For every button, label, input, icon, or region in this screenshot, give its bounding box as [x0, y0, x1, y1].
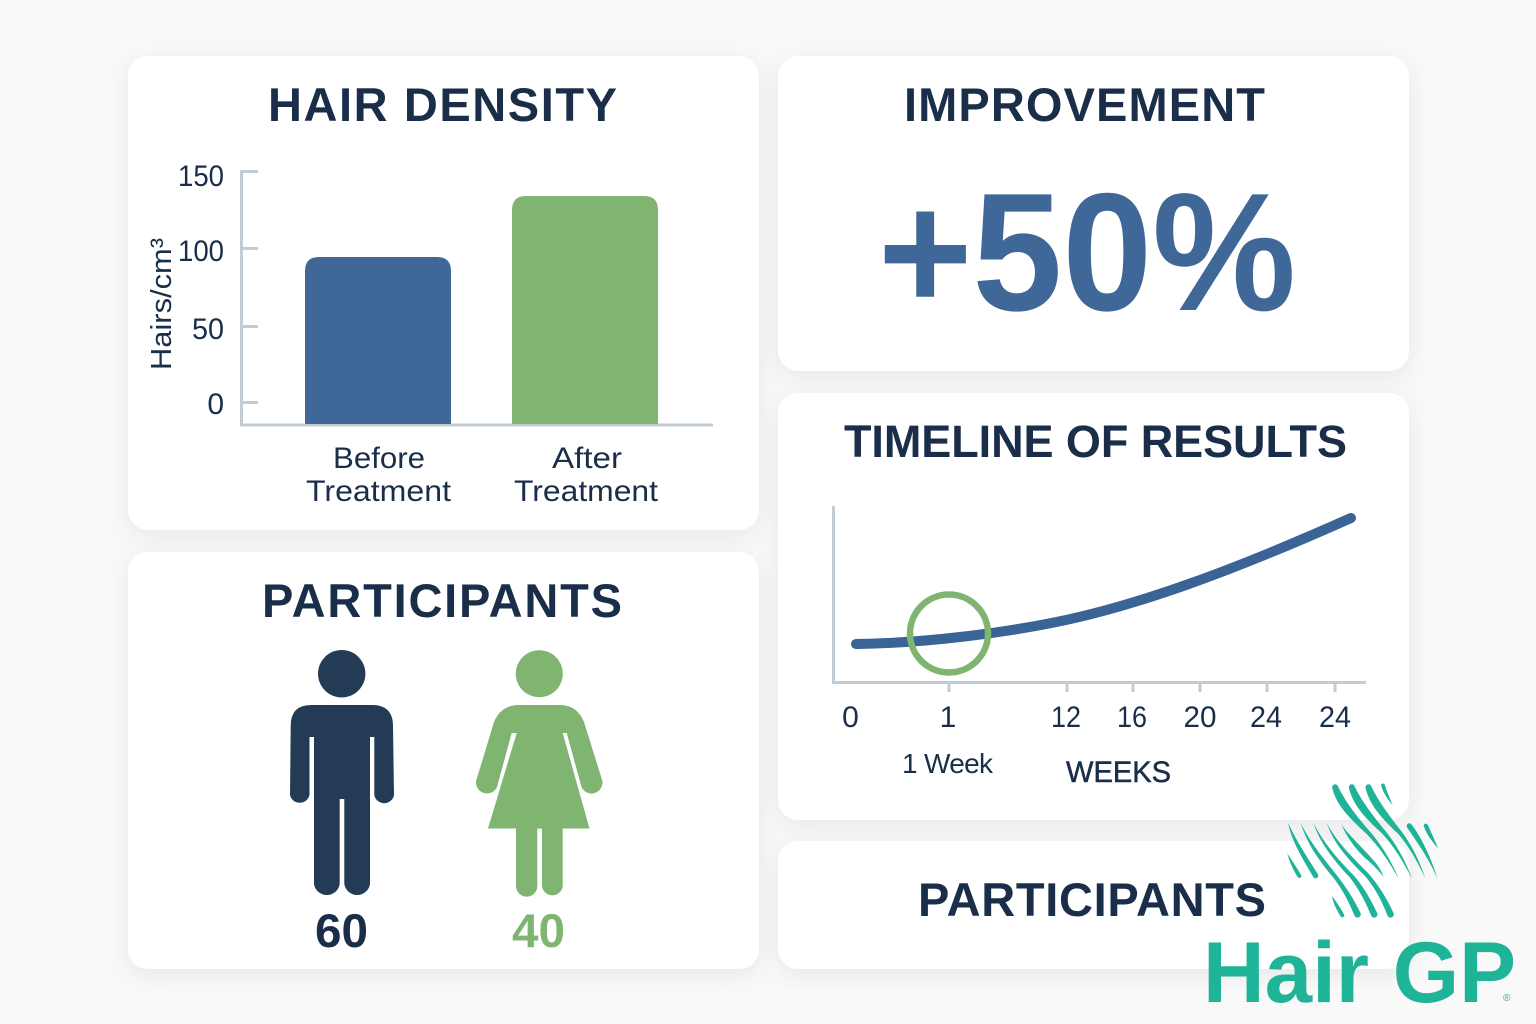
icon: man [290, 650, 394, 895]
y axis values: 0 [207, 388, 224, 421]
y axis values: 50 [192, 313, 224, 346]
curve: results over time [856, 518, 1351, 644]
logo: Hair GP [1203, 784, 1516, 1021]
panel: timeline of results [778, 393, 1409, 820]
label: after treatment [514, 442, 659, 508]
axis title: weeks: WEEKS [1066, 756, 1171, 789]
heading: participants footer: PARTICIPANTS [918, 873, 1266, 926]
x axis values: 0 [842, 701, 859, 734]
x axis values: 16 [1117, 701, 1147, 734]
label: after treatment: Treatment [514, 475, 659, 508]
heading: timeline of results: TIMELINE OF RESULTS [844, 416, 1347, 467]
label: before treatment: Treatment [306, 475, 452, 508]
value: 60 men: 60 [315, 904, 368, 957]
bar: before treatment [305, 257, 451, 424]
x axis values [842, 701, 1351, 734]
y axis values [178, 160, 224, 421]
x axis values: 24 [1250, 701, 1282, 734]
x axis values: 12 [1051, 701, 1081, 734]
panel: participants with figures [128, 552, 759, 969]
heading: participants: PARTICIPANTS [262, 574, 622, 627]
x axis values: 1 [940, 701, 956, 734]
x axis values: 24 [1319, 701, 1351, 734]
label: before treatment [306, 442, 452, 508]
label: 1 week: 1 Week [902, 748, 994, 779]
panel: improvement [778, 56, 1409, 371]
marker: 1 week circle [910, 594, 988, 672]
line chart: timeline [834, 506, 1366, 789]
label: after treatment: After [552, 442, 622, 475]
registered mark: ® [1503, 993, 1511, 1004]
y axis label: Hairs/cm³ [146, 238, 178, 370]
icon: hair strands [1287, 784, 1438, 918]
value: 40 women: 40 [512, 904, 565, 957]
label: before treatment: Before [333, 442, 425, 475]
icon: woman [476, 650, 602, 897]
y axis values: 100 [178, 235, 224, 268]
bar: after treatment [512, 196, 658, 424]
heading: improvement: IMPROVEMENT [904, 78, 1265, 131]
y axis values: 150 [178, 160, 224, 193]
x axis values: 20 [1184, 701, 1216, 734]
panel: hair density [128, 56, 759, 530]
panel: participants footer [778, 841, 1409, 969]
wordmark: Hair GP [1203, 925, 1516, 1021]
bar chart: hair density [146, 160, 713, 508]
heading: hair density: HAIR DENSITY [268, 78, 617, 131]
big stat: +50%: +50% [878, 158, 1296, 346]
